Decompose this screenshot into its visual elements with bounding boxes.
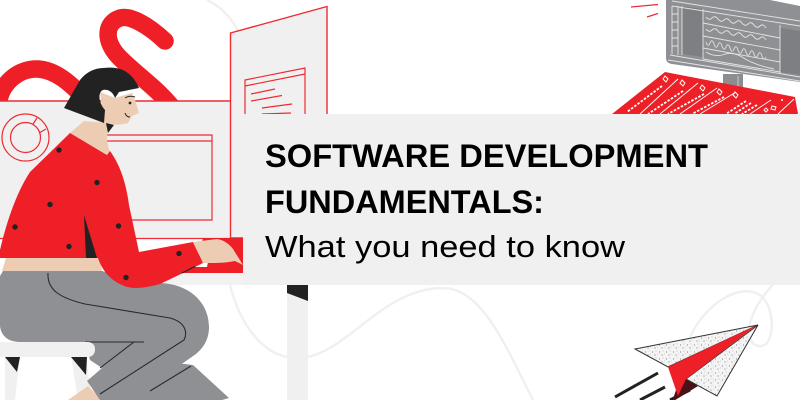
face [100, 92, 139, 125]
tall document panel [230, 6, 327, 238]
neck shadow [106, 123, 114, 133]
red curved cables [0, 17, 176, 112]
midriff [2, 258, 102, 271]
subheading: What you need to know [265, 229, 626, 264]
sweater [0, 133, 203, 288]
monitor on keyboard, top right [612, 0, 800, 114]
left wing [635, 325, 758, 367]
emphasis ticks [631, 4, 658, 17]
heading: SOFTWARE DEVELOPMENT [265, 138, 708, 174]
stool [5, 356, 92, 400]
hand [193, 239, 243, 265]
trousers [0, 271, 209, 400]
screen outline [107, 135, 212, 220]
speed lines [615, 373, 690, 400]
document text lines [245, 68, 305, 114]
screen side panes [682, 6, 800, 75]
keyboard key marks [627, 76, 794, 114]
right wing [686, 325, 758, 396]
far leg [130, 360, 229, 400]
neck [70, 121, 113, 158]
screen details [668, 1, 800, 81]
person [0, 68, 243, 400]
red keyboard strip [0, 238, 243, 273]
background flight path curves [207, 0, 800, 400]
trouser fold lines [48, 273, 191, 394]
foot [68, 386, 102, 400]
stool seat [0, 342, 95, 357]
red keyboard [612, 72, 798, 114]
heading second line: FUNDAMENTALS: [265, 184, 544, 220]
hair [64, 68, 139, 123]
monitor stand [723, 74, 743, 88]
paper plane [615, 325, 758, 400]
desktop monitor back panel [0, 101, 231, 238]
icon: donut chart [2, 114, 49, 161]
title panel [243, 114, 800, 285]
sweater polka dots [12, 147, 182, 280]
desk surface [150, 273, 243, 285]
sweater shadow [84, 215, 97, 258]
monitor screen [666, 0, 800, 82]
dark fold [672, 378, 698, 400]
desk leg [287, 285, 308, 400]
eye, brow, mouth [125, 96, 135, 117]
red keel [668, 325, 757, 396]
